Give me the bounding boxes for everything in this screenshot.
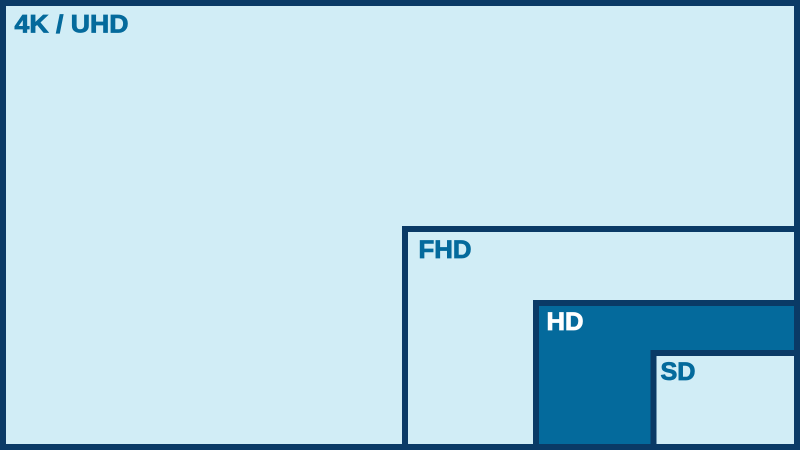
panel: HD (536, 303, 797, 447)
label: FHD: FHD (418, 236, 472, 264)
label: HD: HD (546, 308, 584, 336)
panel: FHD (405, 229, 797, 447)
panel: SD (654, 353, 797, 447)
label: SD: SD (660, 358, 696, 386)
label: 4K / UHD: 4K / UHD (14, 10, 128, 38)
